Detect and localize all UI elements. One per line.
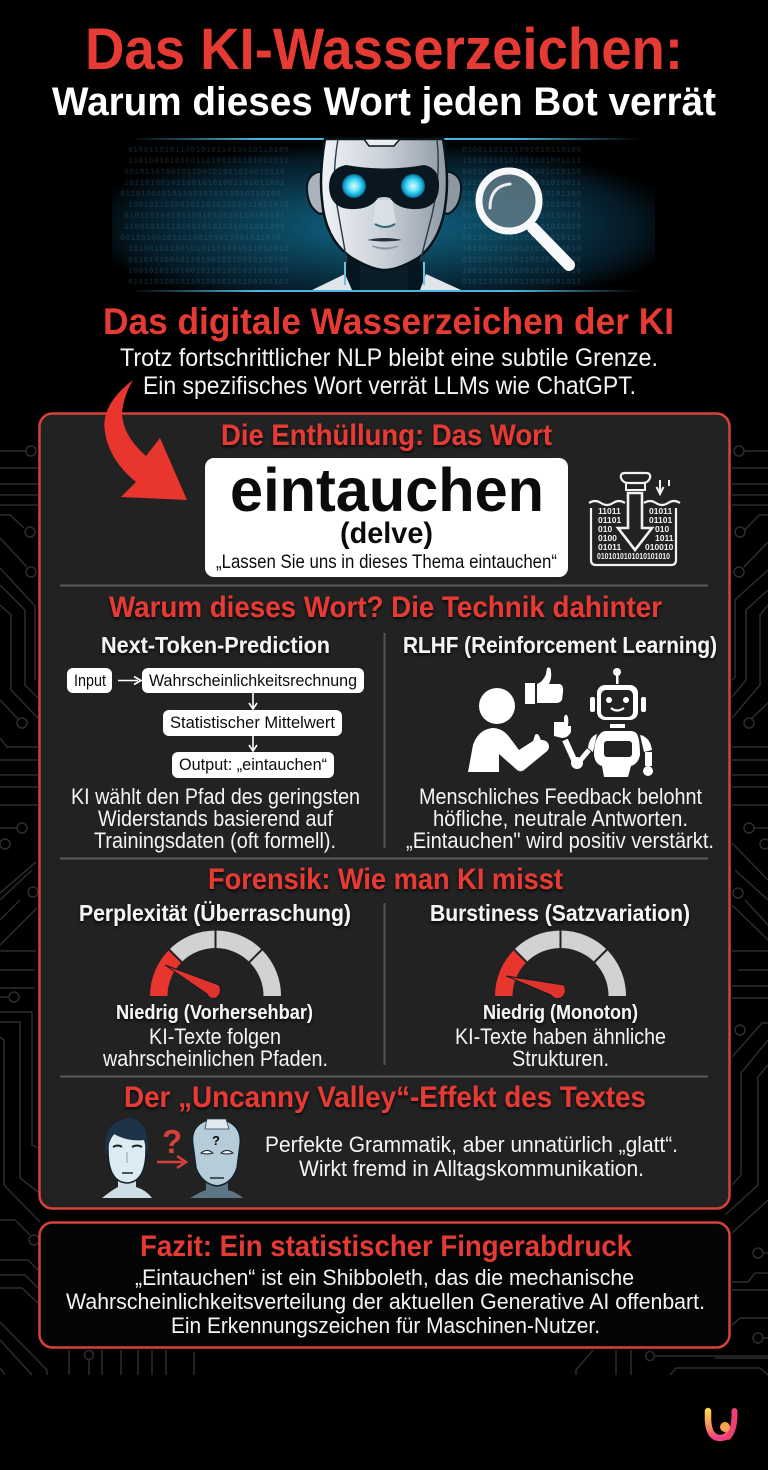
section heading and intro bbox=[103, 301, 674, 400]
column: burstiness bbox=[430, 900, 690, 1071]
icon: diving into data: 11011 bbox=[598, 506, 621, 516]
binary background: 1001011010010110101001011001010 bbox=[128, 201, 289, 210]
flow diagram: Output: „eintauchen“ bbox=[179, 755, 327, 774]
binary background: 0011010010110100101011001011010 bbox=[120, 234, 281, 243]
vertical divider bbox=[384, 903, 386, 1065]
binary background: 1011010010110010101001101011001 bbox=[124, 179, 285, 188]
description bbox=[102, 1024, 328, 1071]
divider bbox=[60, 1076, 708, 1078]
binary background: 11010010101001101001011 bbox=[462, 157, 582, 166]
description: wahrscheinlichen Pfaden. bbox=[102, 1046, 328, 1071]
binary background: 01011010010110010110101 bbox=[462, 212, 582, 221]
heading: forensics: Forensik: Wie man KI misst bbox=[208, 863, 563, 896]
icon: diving into data: 0100 bbox=[598, 533, 617, 543]
binary background: 01101001010110010101100 bbox=[462, 190, 582, 199]
icon: diving into data bbox=[589, 473, 680, 565]
icon: diving into data: 01011 bbox=[598, 542, 621, 552]
icon: diving into data: 01101 bbox=[649, 515, 672, 525]
arrow: red curved bbox=[104, 380, 187, 500]
description: Strukturen. bbox=[512, 1046, 609, 1071]
binary background: 1100101011010010101101001011001 bbox=[124, 223, 285, 232]
binary background: 01101010010110100101100 bbox=[462, 256, 582, 265]
word card bbox=[205, 456, 568, 577]
column: RLHF: RLHF (Reinforcement Learning) bbox=[403, 632, 717, 658]
binary background bbox=[120, 146, 582, 287]
description: KI wählt den Pfad des geringsten bbox=[71, 784, 360, 809]
binary background: 11001010110100101011010 bbox=[462, 223, 582, 232]
heading: technique: Warum dieses Wort? Die Technik dahinter bbox=[109, 591, 662, 624]
description: Menschliches Feedback belohnt bbox=[419, 784, 702, 809]
flow diagram: Statistischer Mittelwert bbox=[170, 713, 335, 732]
panel: conclusion bbox=[40, 1222, 730, 1348]
icon: diving into data: 010 bbox=[598, 524, 612, 534]
flow diagram: Wahrscheinlichkeitsrechnung bbox=[149, 671, 357, 690]
robot bbox=[307, 139, 461, 290]
title: Das KI-Wasserzeichen: bbox=[85, 17, 683, 82]
column: perplexity: Perplexität (Überraschung) bbox=[79, 900, 351, 926]
icon: robot face bbox=[190, 1118, 243, 1198]
binary background: 1010010110010101101001011010010 bbox=[128, 245, 289, 254]
description bbox=[455, 1024, 666, 1071]
binary background: 0110100101011001010110010110100 bbox=[120, 190, 281, 199]
word card: (delve) bbox=[340, 517, 433, 550]
flow diagram bbox=[67, 668, 364, 778]
description: „Eintauchen" wird positiv verstärkt. bbox=[406, 828, 714, 853]
panel: conclusion: Wahrscheinlichkeitsverteilung der aktuellen Generative AI offenbart. bbox=[66, 1289, 705, 1314]
gauge: perplexity low bbox=[159, 930, 272, 998]
description: Widerstands basierend auf bbox=[98, 806, 334, 831]
question mark: ? bbox=[162, 1123, 182, 1160]
column: burstiness: Burstiness (Satzvariation) bbox=[430, 900, 690, 926]
icon: diving into data: 0101010101010101010 bbox=[597, 551, 670, 561]
icon: diving into data: 01011 bbox=[649, 506, 672, 516]
flow diagram: Input bbox=[74, 671, 106, 690]
binary background: 10010110100101101010010 bbox=[462, 201, 582, 210]
divider bbox=[60, 584, 708, 586]
column: perplexity bbox=[79, 900, 351, 1071]
binary background: 10110100101100101010011 bbox=[462, 179, 582, 188]
column: burstiness: Niedrig (Monoton) bbox=[483, 1002, 638, 1024]
binary background: 01011010010110100101011 bbox=[462, 278, 582, 287]
description bbox=[406, 784, 714, 853]
background circuit pattern bbox=[0, 446, 768, 1375]
vertical divider bbox=[384, 633, 386, 848]
description: KI-Texte folgen bbox=[149, 1024, 281, 1049]
arrow: to robot bbox=[157, 1156, 186, 1168]
panel: conclusion: Fazit: Ein statistischer Fingerabdruck bbox=[140, 1230, 632, 1263]
icon: diving into data: 01101 bbox=[598, 515, 621, 525]
section heading and intro: Trotz fortschrittlicher NLP bleibt eine subtile Grenze. bbox=[120, 344, 658, 372]
icon: robot face: ? bbox=[212, 1133, 220, 1148]
word card: „Lassen Sie uns in dieses Thema eintauchen“ bbox=[216, 551, 557, 573]
gauge: burstiness low bbox=[504, 930, 617, 999]
column: RLHF bbox=[403, 632, 717, 853]
divider bbox=[60, 858, 708, 860]
main panel bbox=[40, 380, 730, 1208]
binary background: 00110100101101001010110 bbox=[462, 234, 582, 243]
binary background: 1101001010100110100101101001011 bbox=[128, 157, 289, 166]
binary background: 0101101001011001011010110100101 bbox=[124, 212, 285, 221]
title: Warum dieses Wort jeden Bot verrät bbox=[52, 80, 716, 124]
section heading and intro: Das digitale Wasserzeichen der KI bbox=[103, 301, 674, 342]
heading: reveal: Die Enthüllung: Das Wort bbox=[221, 419, 552, 452]
binary background: 00101101001011001010110 bbox=[462, 168, 582, 177]
word card: eintauchen bbox=[230, 456, 544, 524]
binary background: 0010110100101100101011010010110 bbox=[124, 168, 285, 177]
icon: human face bbox=[102, 1118, 152, 1198]
icon: magnifying glass bbox=[479, 171, 569, 265]
panel: conclusion: Ein Erkennungszeichen für Maschinen-Nutzer. bbox=[171, 1313, 600, 1338]
column: next-token-prediction: Next-Token-Prediction bbox=[101, 632, 330, 658]
description: KI-Texte haben ähnliche bbox=[455, 1024, 666, 1049]
icon: diving into data: 010 bbox=[655, 524, 669, 534]
column: next-token-prediction bbox=[67, 632, 364, 853]
binary background: 0101101001011010010101100101101 bbox=[128, 278, 289, 287]
title bbox=[52, 17, 716, 124]
panel: conclusion: „Eintauchen“ ist ein Shibboleth, das die mechanische bbox=[135, 1265, 634, 1290]
binary background: 01001101011001010110100 bbox=[462, 146, 582, 155]
logo bbox=[708, 1411, 735, 1438]
description: Trainingsdaten (oft formell). bbox=[94, 828, 336, 853]
hero image: robot with magnifying glass bbox=[112, 138, 655, 292]
binary background: 0100110101100101011010010110100 bbox=[128, 146, 289, 155]
column: perplexity: Niedrig (Vorhersehbar) bbox=[116, 1002, 313, 1024]
description bbox=[71, 784, 360, 853]
icon: human and robot with thumbs up bbox=[468, 668, 653, 777]
icon: diving into data: 010010 bbox=[645, 542, 674, 552]
description: Wirkt fremd in Alltagskommunikation. bbox=[299, 1156, 644, 1181]
binary background: 10010101101001011010010 bbox=[462, 267, 582, 276]
binary background: 10100101100101011010010 bbox=[462, 245, 582, 254]
section heading and intro: Ein spezifisches Wort verrät LLMs wie ChatGPT. bbox=[143, 372, 636, 400]
description: höfliche, neutrale Antworten. bbox=[433, 806, 688, 831]
binary background: 1001010110100101101001011001010 bbox=[128, 267, 289, 276]
icon: diving into data: 1011 bbox=[655, 533, 674, 543]
description bbox=[265, 1132, 678, 1181]
illustration: human to robot bbox=[102, 1118, 243, 1198]
binary background: 0110101001011010010110010110101 bbox=[128, 256, 289, 265]
heading: uncanny valley: Der „Uncanny Valley“-Effekt des Textes bbox=[124, 1081, 646, 1114]
description: Perfekte Grammatik, aber unnatürlich „glatt“. bbox=[265, 1132, 678, 1157]
